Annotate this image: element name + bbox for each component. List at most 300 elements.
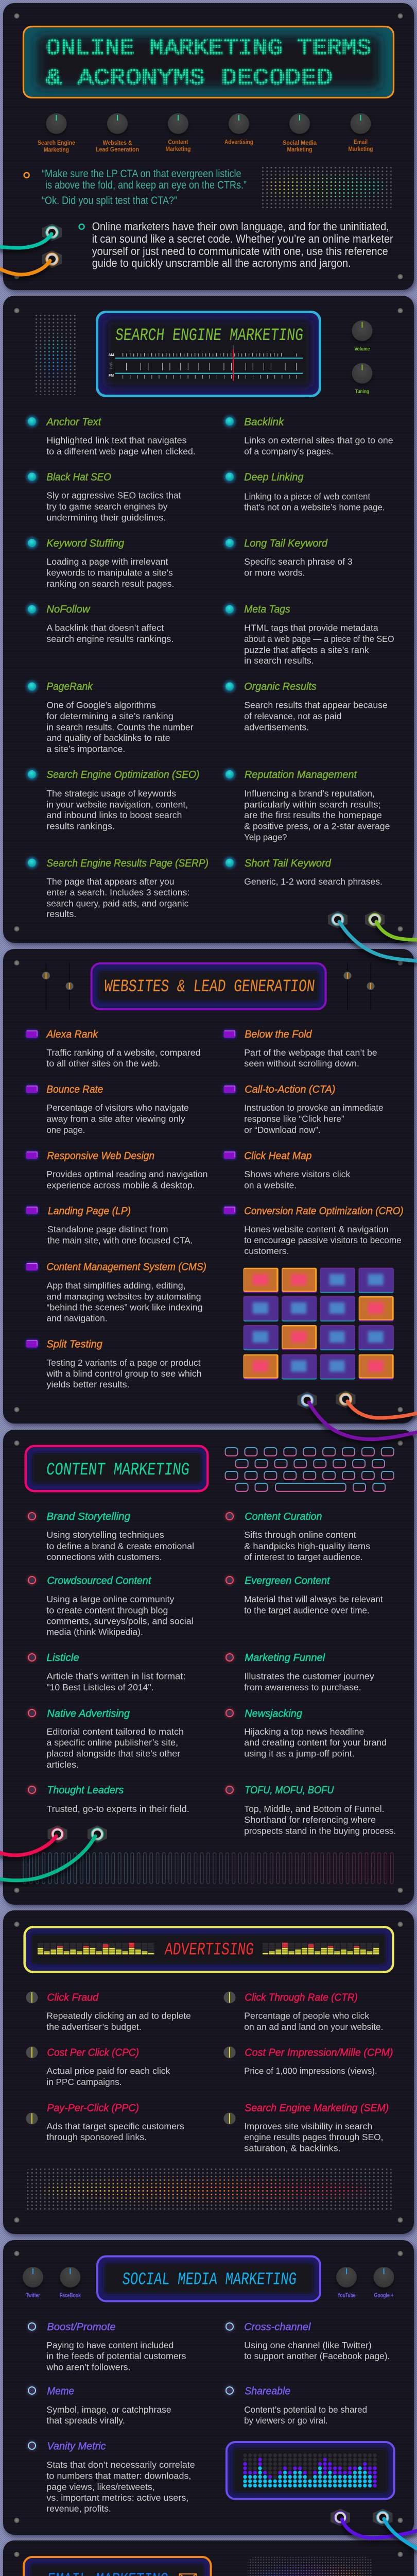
term: Black Hat SEO <box>26 471 181 522</box>
term: Pay-Per-Click: Ads that target specific customers <box>46 2121 184 2131</box>
term: PageRank: in search results. Counts the number <box>46 722 194 733</box>
term: PageRank: for determining a site’s ranking <box>46 711 173 721</box>
term: PageRank: One of Google’s algorithms <box>46 700 156 710</box>
term: Vanity Metric: page views, likes/retweets, <box>46 2482 155 2492</box>
screws <box>14 1922 403 2223</box>
term: Thought Leaders: Trusted, go-to experts in their field. <box>46 1804 189 1814</box>
term: Meta Tags: puzzle that affects a site’s rank <box>244 645 369 655</box>
term: Thought Leaders <box>27 1785 189 1814</box>
term: Content Curation: Content Curation <box>245 1511 322 1522</box>
term: Shareable: Content’s potential to be shared <box>244 2404 367 2415</box>
term: Long Tail Keyword: Long Tail Keyword <box>244 538 328 549</box>
term: Long Tail Keyword: Specific search phrase of 3 <box>244 556 353 567</box>
term: Backlink <box>224 416 393 456</box>
term: Backlink: of a company’s pages. <box>244 446 333 456</box>
section heading display <box>97 2257 320 2301</box>
knob: content marketing: Marketing <box>166 145 190 152</box>
term: Bounce Rate <box>26 1084 189 1135</box>
term: Responsive Web Design: experience across mobile & desktop. <box>46 1180 195 1190</box>
term: Search Engine Optimization: and inbound links to boost search <box>46 810 182 820</box>
cable: red-orange, websites <box>348 1401 417 1418</box>
term: PageRank: PageRank <box>46 681 93 692</box>
screws <box>14 308 403 931</box>
term: Crowdsourced Content: Using a large online community <box>46 1594 175 1604</box>
term: Meta Tags: Meta Tags <box>244 604 290 615</box>
section heading display: SOCIAL MEDIA MARKETING <box>121 2270 298 2290</box>
term: Search Engine Results Page <box>26 857 208 919</box>
knob: email marketing: Email <box>354 138 368 145</box>
term: TOFU, MOFU, BOFU: Top, Middle, and Bottom of Funnel. <box>244 1804 384 1814</box>
term: Listicle <box>27 1652 186 1692</box>
term: Short Tail Keyword <box>224 857 383 887</box>
intro text: Online marketers have their own language, and for the uninitiated, <box>92 220 389 233</box>
term: Meme <box>27 2385 171 2426</box>
knob: websites and lead generation: Lead Generation <box>96 146 139 153</box>
term: Vanity Metric <box>27 2441 195 2514</box>
term: Keyword Stuffing: Loading a page with irrelevant <box>46 556 168 567</box>
term: Long Tail Keyword: or more words. <box>244 568 305 578</box>
term: Responsive Web Design <box>26 1150 207 1190</box>
term: Below the Fold: Below the Fold <box>245 1029 312 1040</box>
knob: Google + <box>374 2267 394 2299</box>
term: Deep Linking <box>224 471 385 513</box>
term: Search Engine Optimization: results rankings. <box>46 821 115 832</box>
term: Search Engine Marketing: engine results pages through SEO, <box>244 2132 383 2142</box>
term: Black Hat SEO: undermining their guidelines. <box>46 512 166 522</box>
knob: search engine marketing: Marketing <box>44 146 69 154</box>
term: Boost/Promote: in the feeds of potential customers <box>46 2351 186 2361</box>
jack: purple <box>331 2509 350 2526</box>
term: Native Advertising: placed alongside that site’s other <box>46 1749 180 1759</box>
icon: envelope <box>179 2574 197 2576</box>
section heading display <box>92 963 326 1009</box>
term: Organic Results: Organic Results <box>244 681 317 692</box>
section heading display <box>97 312 320 396</box>
term: Click Through Rate: Click Through Rate (CTR) <box>245 1992 358 2004</box>
term: Meme: Meme <box>47 2385 74 2397</box>
term: Newsjacking: Hijacking a top news headline <box>244 1726 364 1737</box>
jack: blue <box>328 911 348 928</box>
term: Click Through Rate: on an ad and land on your website. <box>244 2022 383 2032</box>
term: Cross-channel: Using one channel (like Twitter) <box>244 2340 372 2350</box>
term: Vanity Metric: to numbers that matter: downloads, <box>46 2470 191 2481</box>
term: Vanity Metric: Stats that don’t necessarily correlate <box>46 2460 195 2470</box>
knob: FaceBook: FaceBook <box>60 2292 81 2299</box>
knob: FaceBook <box>60 2267 81 2299</box>
term: Click Heat Map <box>223 1150 351 1190</box>
intro text: yourself or just need to communicate with one, use this reference <box>92 245 388 258</box>
term: Brand Storytelling: Using storytelling techniques <box>46 1530 164 1540</box>
term: Click Heat Map: on a website. <box>244 1180 297 1190</box>
term: Native Advertising: articles. <box>46 1759 79 1770</box>
knob: advertising <box>224 113 253 145</box>
panel: advertising <box>3 1910 414 2234</box>
term: Keyword Stuffing <box>26 537 174 589</box>
screws <box>14 13 403 279</box>
term: Search Engine Marketing: saturation, & backlinks. <box>244 2143 341 2154</box>
term: Reputation Management: particularly within search results; <box>244 800 381 810</box>
cable: green, content marketing <box>0 1836 95 1880</box>
term: Responsive Web Design: Responsive Web Design <box>47 1150 154 1162</box>
term: Split Testing: yields better results. <box>46 1379 130 1389</box>
term: Search Engine Optimization <box>26 769 199 832</box>
term: Bounce Rate: away from a site after viewing only <box>46 1114 185 1124</box>
section heading display: WEBSITES & LEAD GENERATION <box>103 977 316 997</box>
knob: volume: Volume <box>354 346 370 352</box>
term: Shareable: Shareable <box>245 2385 290 2397</box>
vent bars <box>23 1852 395 1884</box>
term: Click Heat Map: Shows where visitors click <box>244 1169 351 1179</box>
term: Deep Linking: Deep Linking <box>244 472 304 483</box>
knob: Google +: Google + <box>374 2292 393 2299</box>
term: Reputation Management: & positive press, or a 2-star average <box>244 821 390 832</box>
term: Conversion Rate Optimization <box>223 1206 404 1256</box>
cable: purple, websites <box>309 1402 417 1439</box>
knob: volume <box>352 320 373 352</box>
term: Reputation Management: Reputation Management <box>245 769 357 781</box>
term: Crowdsourced Content: to create content through blog <box>46 1605 168 1615</box>
term: Content Curation <box>225 1511 370 1562</box>
panel: websites and lead generation <box>3 949 414 1423</box>
term: Content Curation: Sifts through online content <box>244 1530 356 1540</box>
term: Evergreen Content: Evergreen Content <box>245 1575 331 1587</box>
keyboard <box>225 1448 394 1492</box>
term: Bounce Rate: Percentage of visitors who navigate <box>46 1103 189 1113</box>
term: Pay-Per-Click: Pay-Per-Click (PPC) <box>47 2103 139 2114</box>
term: Crowdsourced Content: Crowdsourced Content <box>47 1575 152 1587</box>
term: Thought Leaders: Thought Leaders <box>47 1785 124 1796</box>
jack: blue <box>298 1392 317 1409</box>
term: Boost/Promote: who aren’t followers. <box>46 2362 131 2372</box>
term: Meme: that spreads virally. <box>46 2415 125 2426</box>
term: PageRank: a site’s importance. <box>46 744 125 754</box>
term: Content Management System <box>26 1262 206 1324</box>
term: Search Engine Marketing <box>223 2103 389 2154</box>
term: Reputation Management <box>224 769 390 842</box>
quote: is above the fold, and keep an eye on the CTRs.” <box>45 179 247 191</box>
jack: orange <box>42 250 62 268</box>
term: Brand Storytelling: to define a brand & create emotional <box>46 1541 194 1551</box>
term: Evergreen Content: to the target audience over time. <box>244 1605 370 1615</box>
term: Crowdsourced Content <box>27 1575 194 1637</box>
term: Content Management System: and managing websites by automating <box>46 1291 201 1301</box>
term: Below the Fold: seen without scrolling down. <box>244 1058 359 1069</box>
tuner dial <box>109 345 303 381</box>
term: Listicle: "10 Best Listicles of 2014". <box>46 1682 154 1692</box>
tuner dial: AM <box>109 353 114 357</box>
term: Conversion Rate Optimization: Conversion Rate Optimization (CRO) <box>244 1206 404 1217</box>
term: Boost/Promote: Paying to have content included <box>46 2340 173 2350</box>
term: Landing Page: the main site, with one focused CTA. <box>47 1235 193 1246</box>
term: Search Engine Optimization: Search Engine Optimization (SEO) <box>46 769 199 781</box>
term: Listicle: Article that’s written in list format: <box>46 1671 186 1682</box>
term: Boost/Promote: Boost/Promote <box>47 2321 116 2333</box>
section heading display <box>25 1927 393 1972</box>
term: Newsjacking: and creating content for your brand <box>244 1737 387 1748</box>
term: Landing Page: Standalone page distinct from <box>47 1224 168 1234</box>
term: Cost Per Click: Cost Per Click (CPC) <box>47 2047 139 2059</box>
term: Black Hat SEO: try to game search engines by <box>46 501 168 512</box>
term: Vanity Metric: Vanity Metric <box>47 2441 106 2452</box>
term: Cross-channel <box>225 2321 390 2361</box>
knobs: category navigation <box>38 113 373 154</box>
term: NoFollow: search engine results rankings. <box>46 634 173 644</box>
term: Shareable: by viewers or go viral. <box>244 2415 327 2426</box>
term: Meta Tags: HTML tags that provide metadata <box>244 623 378 633</box>
term: Call-to-Action: Instruction to provoke an immediate <box>244 1103 383 1113</box>
term: Reputation Management: Influencing a brand’s reputation, <box>244 788 375 799</box>
intro text <box>79 220 393 269</box>
term: Native Advertising: Editorial content tailored to match <box>46 1726 184 1737</box>
term: Evergreen Content <box>225 1575 383 1615</box>
term: Brand Storytelling: connections with customers. <box>46 1552 162 1562</box>
term: Native Advertising: a specific online publisher’s site, <box>46 1737 178 1748</box>
knob: tuning <box>352 363 373 395</box>
knob: tuning: Tuning <box>355 388 369 395</box>
term: Content Management System: and navigation. <box>46 1313 108 1324</box>
term: Search Engine Marketing: Improves site visibility in search <box>244 2121 372 2131</box>
term: Meta Tags: about a web page — a piece of the SEO <box>244 634 394 644</box>
term: Bounce Rate: one page. <box>46 1125 85 1135</box>
cable: green, search engine marketing <box>376 922 417 940</box>
tuner dial: 2235 <box>110 362 113 369</box>
term: Below the Fold <box>223 1029 377 1069</box>
term: Click Heat Map: Click Heat Map <box>244 1150 312 1162</box>
term: Keyword Stuffing: keywords to manipulate a site’s <box>46 568 173 578</box>
term: Content Management System: “behind the scenes” work like indexing <box>46 1302 203 1313</box>
term: Search Engine Results Page: results. <box>46 909 76 919</box>
term: Cost Per Click <box>26 2046 170 2087</box>
tuner dial: FM <box>109 374 114 378</box>
term: Call-to-Action: or “Download now”. <box>244 1125 321 1135</box>
term: Landing Page: Landing Page (LP) <box>48 1206 131 1217</box>
knob: YouTube: YouTube <box>338 2292 356 2299</box>
term: Anchor Text <box>26 416 196 456</box>
term: Reputation Management: Yelp page? <box>244 832 287 842</box>
jack: green <box>88 1825 107 1843</box>
term: Crowdsourced Content: comments, surveys/polls, and social <box>46 1616 194 1626</box>
screws <box>14 1440 403 1893</box>
term: Search Engine Results Page: search query, paid ads, and organic <box>46 899 189 909</box>
knob: websites and lead generation <box>96 113 139 153</box>
term: Organic Results: advertisements. <box>244 722 309 733</box>
term: Anchor Text: Anchor Text <box>46 416 102 428</box>
term: Cross-channel: to support another (Facebook page). <box>244 2351 390 2361</box>
knob: email marketing <box>348 113 373 152</box>
knob: search engine marketing: Search Engine <box>38 139 75 146</box>
term: Responsive Web Design: Provides optimal reading and navigation <box>46 1169 207 1179</box>
term: Cost Per Click: Actual price paid for each click <box>46 2066 170 2076</box>
term: Content Management System: App that simplifies adding, editing, <box>46 1280 186 1291</box>
dot grid: speaker <box>26 2168 394 2212</box>
term: Backlink: Links on external sites that go to one <box>244 435 393 445</box>
dot grid: speaker <box>248 2557 373 2576</box>
knob: search engine marketing <box>38 113 75 154</box>
term: Short Tail Keyword: Short Tail Keyword <box>245 858 332 869</box>
term: Backlink: Backlink <box>244 416 284 428</box>
term: Brand Storytelling: Brand Storytelling <box>46 1511 130 1522</box>
term: Anchor Text: Highlighted link text that navigates <box>46 435 187 445</box>
term: Click Fraud: Repeatedly clicking an ad to deplete <box>46 2011 191 2021</box>
knob: social media marketing: Social Media <box>283 139 317 146</box>
term: Click Fraud: Click Fraud <box>47 1992 99 2004</box>
quote <box>24 168 247 207</box>
term: Organic Results: of relevance, not as paid <box>244 711 341 721</box>
term: Search Engine Optimization: in your website navigation, content, <box>46 800 188 810</box>
term: Evergreen Content: Material that will always be relevant <box>244 1594 383 1604</box>
term: Cross-channel: Cross-channel <box>244 2321 311 2333</box>
term: Bounce Rate: Bounce Rate <box>46 1084 103 1095</box>
term: Brand Storytelling <box>27 1511 194 1562</box>
term: Alexa Rank: Alexa Rank <box>46 1029 98 1040</box>
term: NoFollow: A backlink that doesn’t affect <box>46 623 164 633</box>
cable: orange, intro <box>0 261 50 275</box>
term: Landing Page <box>26 1206 193 1246</box>
section heading display <box>26 1446 207 1491</box>
term: Call-to-Action: response like “Click here” <box>244 1114 344 1124</box>
panel: intro <box>3 3 414 290</box>
term: Shareable <box>225 2385 367 2426</box>
screws <box>14 960 403 1412</box>
knob: social media marketing <box>283 113 317 153</box>
cable: red, content marketing <box>0 1836 56 1855</box>
term: Conversion Rate Optimization: Hones website content & navigation <box>244 1224 389 1234</box>
title display <box>24 27 393 98</box>
section title: ADVERTISING <box>164 1941 255 1960</box>
term: Black Hat SEO: Black Hat SEO <box>46 472 111 483</box>
term: Vanity Metric: vs. important metrics: active users, <box>46 2493 188 2503</box>
sliders: left <box>42 963 73 1010</box>
knob: Twitter <box>23 2267 43 2299</box>
knob: advertising: Advertising <box>224 138 253 145</box>
intro text: it can sound like a secret code. Whether you’re an online marketer <box>92 232 393 245</box>
term: Search Engine Marketing: Search Engine Marketing (SEM) <box>245 2103 389 2114</box>
term: Black Hat SEO: Sly or aggressive SEO tactics that <box>46 490 181 501</box>
term: TOFU, MOFU, BOFU: TOFU, MOFU, BOFU <box>245 1785 334 1796</box>
term: Short Tail Keyword: Generic, 1-2 word search phrases. <box>244 876 383 887</box>
term: Vanity Metric: revenue, profits. <box>46 2503 111 2514</box>
knob: websites and lead generation: Websites & <box>103 139 132 146</box>
quote: “Make sure the LP CTA on that evergreen listicle <box>42 168 241 180</box>
term: TOFU, MOFU, BOFU <box>225 1785 396 1836</box>
term: Cost Per Click: in PPC campaigns. <box>46 2077 122 2087</box>
jack: green <box>365 911 385 928</box>
term: Meta Tags <box>224 604 394 666</box>
term: Meta Tags: in search results. <box>244 655 314 666</box>
cable: blue, search engine marketing <box>339 922 417 961</box>
term: Organic Results <box>224 681 388 733</box>
dot matrix display <box>227 2442 394 2499</box>
term: TOFU, MOFU, BOFU: prospects stand in the buying process. <box>244 1826 396 1836</box>
term: Marketing Funnel: Illustrates the customer journey <box>244 1671 374 1682</box>
term: Cost Per Impression <box>223 2046 393 2076</box>
term: Alexa Rank <box>26 1029 201 1069</box>
term: Newsjacking <box>225 1708 387 1759</box>
cable: blue, social media <box>384 2519 417 2549</box>
term: Reputation Management: are the first results the homepage <box>244 810 382 820</box>
term: NoFollow: NoFollow <box>46 604 91 615</box>
term: Conversion Rate Optimization: customers. <box>244 1246 289 1256</box>
term: Split Testing <box>26 1339 202 1389</box>
term: Search Engine Results Page: Search Engine Results Page (SERP) <box>46 858 208 869</box>
term: Alexa Rank: to all other sites on the web. <box>46 1058 161 1069</box>
panel: content marketing <box>3 1430 414 1905</box>
knob: email marketing: Marketing <box>348 145 373 152</box>
term: Marketing Funnel: Marketing Funnel <box>245 1652 325 1664</box>
title display: ONLINE MARKETING TERMS <box>46 36 371 61</box>
term: Click Fraud <box>26 1992 191 2032</box>
panel: search engine marketing <box>3 296 414 943</box>
sliders: right <box>344 963 375 1010</box>
equalizer: left <box>38 1943 155 1955</box>
term: Marketing Funnel: from awareness to purchase. <box>244 1682 361 1692</box>
term: PageRank <box>26 681 194 754</box>
quote: “Ok. Did you split test that CTA?” <box>42 195 177 207</box>
heat map pads <box>244 1268 394 1380</box>
term: Search Engine Results Page: enter a search. Includes 3 sections: <box>46 887 189 897</box>
term: Content Management System: Content Management System (CMS) <box>46 1262 206 1273</box>
section heading display <box>24 2557 211 2576</box>
term: Split Testing: with a blind control group to see which <box>46 1368 202 1379</box>
term: Click Fraud: the advertiser’s budget. <box>46 2022 142 2032</box>
term: Deep Linking: Linking to a piece of web content <box>244 491 370 501</box>
section heading display: CONTENT MARKETING <box>45 1461 190 1480</box>
term: Anchor Text: to a different web page when clicked. <box>46 446 196 456</box>
term: Organic Results: Search results that appear because <box>244 700 388 710</box>
term: Search Engine Results Page: The page that appears after you <box>46 876 174 887</box>
jack: red <box>48 1825 67 1843</box>
term: Cost Per Impression: Cost Per Impression/Mille (CPM) <box>245 2047 393 2059</box>
term: Newsjacking: using it as a jump-off point. <box>244 1749 355 1759</box>
term: Long Tail Keyword <box>224 537 353 578</box>
term: Search Engine Optimization: The strategic usage of keywords <box>46 788 176 799</box>
screws <box>14 2251 403 2523</box>
term: Keyword Stuffing: Keyword Stuffing <box>46 538 124 549</box>
section title: SEARCH ENGINE MARKETING <box>114 326 304 346</box>
term: Content Curation: of interest to target audience. <box>244 1552 363 1562</box>
term: Click Through Rate <box>223 1992 383 2032</box>
term: Click Through Rate: Percentage of people who click <box>244 2011 369 2021</box>
jack: blue <box>373 2509 392 2526</box>
panel: email marketing <box>3 2540 414 2576</box>
intro text: guide to quickly unscramble all the acronyms and jargon. <box>92 257 351 269</box>
term: Newsjacking: Newsjacking <box>245 1708 302 1720</box>
term: Crowdsourced Content: media (think Wikipedia). <box>46 1627 143 1637</box>
term: TOFU, MOFU, BOFU: Shorthand for referencing where <box>244 1815 376 1825</box>
term: Below the Fold: Part of the webpage that can’t be <box>244 1047 377 1058</box>
knob: content marketing <box>166 113 190 152</box>
screws <box>14 2552 403 2576</box>
jack: teal <box>42 224 62 241</box>
dot grid: speaker <box>34 313 78 395</box>
knob: YouTube <box>336 2267 357 2299</box>
dot grid: speaker <box>259 166 394 209</box>
term: Deep Linking: that’s not on a website’s home page. <box>244 502 385 513</box>
term: PageRank: and quality of backlinks to rate <box>46 733 170 743</box>
knob: content marketing: Content <box>168 138 188 145</box>
term: Marketing Funnel <box>225 1652 374 1692</box>
term: Cost Per Impression: Price of 1,000 impressions (views). <box>244 2066 377 2076</box>
term: Alexa Rank: Traffic ranking of a website, compared <box>46 1047 201 1058</box>
term: Split Testing: Split Testing <box>46 1339 102 1350</box>
knob: social media marketing: Marketing <box>287 146 312 153</box>
term: Call-to-Action: Call-to-Action (CTA) <box>245 1084 336 1095</box>
title display: & ACRONYMS DECODED <box>46 65 333 91</box>
term: Call-to-Action <box>223 1084 383 1135</box>
panel: social media marketing <box>3 2240 414 2535</box>
cable: purple, social media <box>342 2519 417 2538</box>
term: Pay-Per-Click <box>26 2103 184 2142</box>
